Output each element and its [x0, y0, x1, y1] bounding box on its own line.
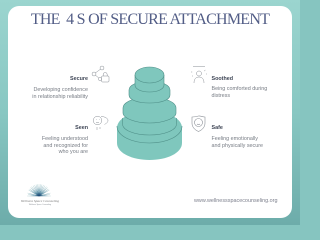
white card panel	[8, 6, 292, 218]
text: Seen description: Feeling understood	[42, 136, 88, 142]
logo name: Wellness Space Counseling	[21, 199, 59, 203]
block: Safe	[212, 125, 263, 148]
block: Soothed	[212, 76, 267, 98]
text: Secure description: Developing confidence	[33, 87, 88, 93]
icon: seen face	[93, 116, 108, 130]
logo: sunburst with name	[21, 184, 59, 206]
text: Secure description	[32, 87, 88, 100]
icon: network and lock	[92, 66, 110, 82]
text: Soothed description: Being comforted during	[212, 86, 267, 92]
title: THE 4 S OF SECURE ATTACHMENT	[31, 11, 269, 28]
block: Seen	[42, 125, 88, 155]
logo tagline: Wellness Space Counseling	[29, 204, 51, 206]
heading: Safe: Safe	[212, 125, 223, 131]
logo sunburst	[27, 184, 51, 196]
website url: www.wellnessspacecounseling.org	[194, 198, 277, 204]
text: Soothed description	[212, 86, 267, 98]
text: Seen description	[42, 136, 88, 155]
text: Seen description: who you are	[59, 149, 88, 155]
icon: soothed person	[191, 66, 207, 83]
text: Safe description	[212, 136, 263, 148]
text: Safe description: and physically secure	[212, 142, 263, 148]
block: Secure	[32, 76, 88, 100]
icon: shield face	[192, 116, 206, 132]
heading: Secure: Secure	[70, 76, 88, 82]
heading: Soothed: Soothed	[212, 76, 233, 82]
heading: Seen: Seen	[75, 125, 88, 131]
text: Safe description: Feeling emotionally	[212, 136, 258, 142]
text: Soothed description: distress	[212, 92, 230, 98]
text: Seen description: and recognized for	[43, 142, 88, 148]
text: Secure description: in relationship reliability	[32, 94, 88, 100]
